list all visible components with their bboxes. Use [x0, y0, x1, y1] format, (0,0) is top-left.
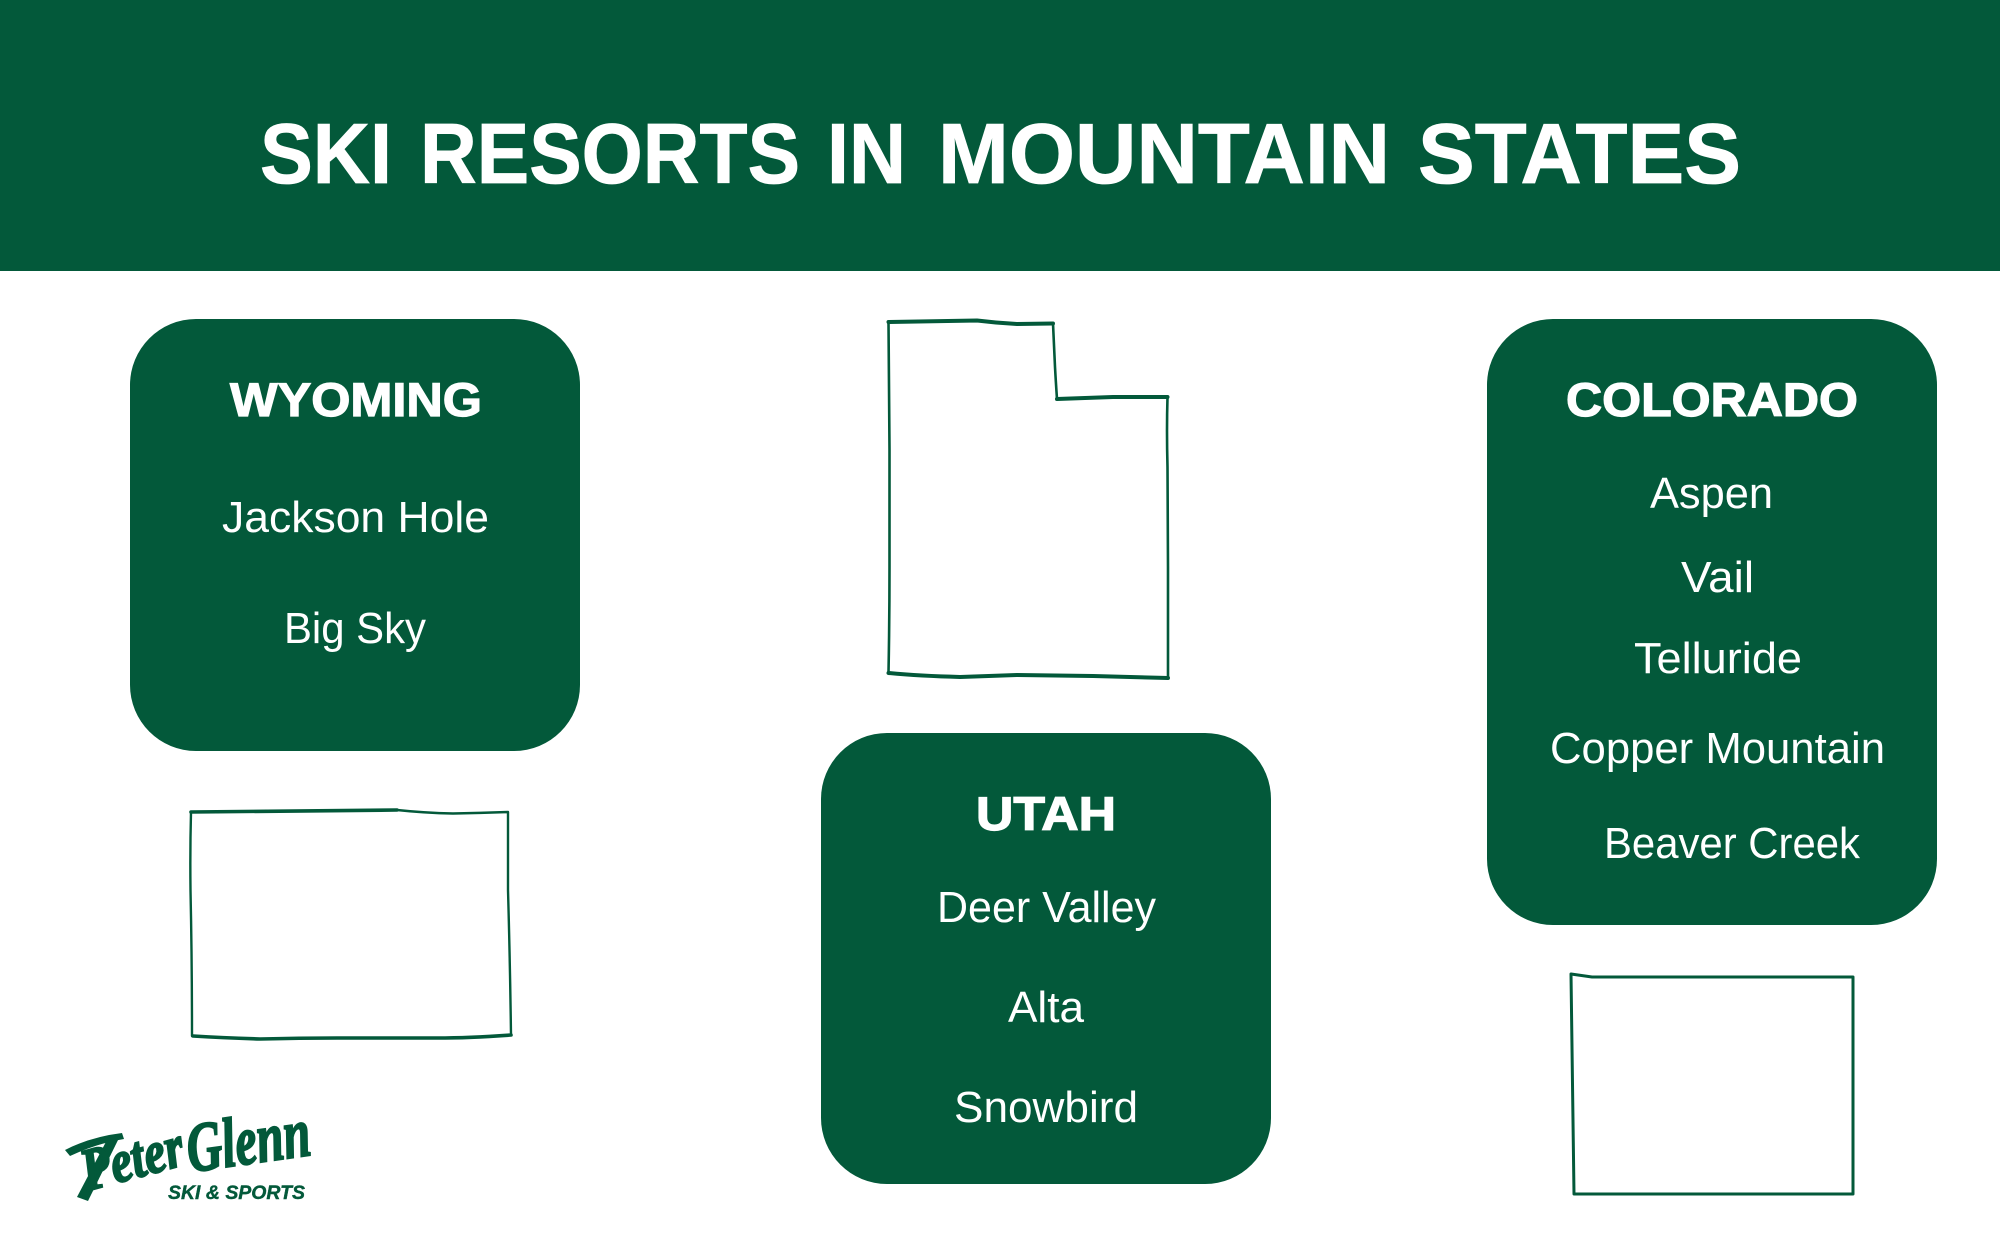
logo wordmark: Glenn: Glenn — [182, 1094, 315, 1188]
logo tagline: SKI & SPORTS — [168, 1183, 305, 1204]
title: RESORTS — [420, 107, 800, 202]
panel: Wyoming — [130, 319, 580, 751]
resort: Big Sky: Big Sky — [284, 604, 426, 653]
logo P stem — [77, 1136, 120, 1201]
resort: Copper Mountain: Copper Mountain — [1550, 724, 1885, 773]
icon: Wyoming state outline — [190, 810, 511, 1039]
panel: Colorado — [1487, 319, 1937, 925]
resort: Jackson Hole: Jackson Hole — [222, 493, 489, 542]
title: IN — [827, 107, 906, 202]
resort: Deer Valley: Deer Valley — [937, 883, 1156, 932]
logo swash — [65, 1133, 124, 1156]
title — [260, 107, 1741, 202]
logo: Peter Glenn Ski & Sports — [65, 1094, 315, 1204]
resort: Telluride: Telluride — [1634, 634, 1802, 683]
resort: Snowbird: Snowbird — [954, 1083, 1138, 1132]
heading: Utah: UTAH — [976, 787, 1116, 840]
resort: Alta: Alta — [1008, 983, 1085, 1032]
resort: Beaver Creek: Beaver Creek — [1604, 819, 1861, 868]
panel: Utah — [821, 733, 1271, 1184]
title: SKI — [260, 107, 392, 202]
logo wordmark: Peter: Peter — [73, 1113, 191, 1204]
title banner — [0, 0, 2000, 271]
heading: Colorado: COLORADO — [1566, 373, 1858, 426]
resort: Vail: Vail — [1681, 553, 1754, 602]
heading: Wyoming: WYOMING — [230, 373, 482, 426]
title: MOUNTAIN — [938, 107, 1390, 202]
title: STATES — [1418, 107, 1741, 202]
icon: Colorado state outline — [1571, 974, 1853, 1194]
resort: Aspen: Aspen — [1650, 469, 1773, 518]
icon: Utah state outline — [888, 320, 1168, 678]
